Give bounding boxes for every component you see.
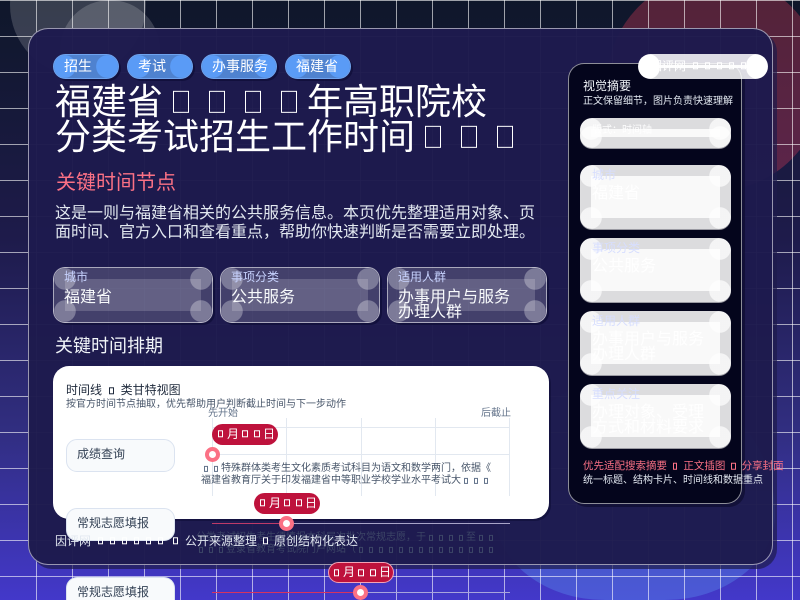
gantt grid [212,418,510,496]
decorative circle: top right pink [607,0,800,191]
summary card: 事项分类: 事项分类 [592,241,640,255]
axis label: end: 后截止 [481,408,511,419]
summary card: 城市 [580,165,731,229]
summary card: 适用人群: 适用人群 [592,314,640,328]
decorative circle: top left large [10,0,146,75]
tag: 福建省 [285,54,351,79]
summary card: 版式 [580,118,731,148]
row 1 label [66,439,175,472]
summary card: 事项分类: 公共服务 [592,258,656,275]
timeline note: 按官方时间节点抽取，优先帮助用户判断截止时间与下一步动作 [66,399,346,410]
title: 福建省 年高职院校 [55,81,487,122]
row 3 label: 常规志愿填报 [77,585,149,599]
summary heading: 视觉摘要 [583,79,631,93]
row 2 description: 登录省教育考试院门户网站（ [226,544,356,555]
row 3 label [66,577,175,600]
row 3 marker [353,585,368,600]
row 2 date pill: 月 日 [269,496,317,510]
row 2 label [66,508,175,541]
visual summary panel [568,63,742,504]
intro paragraph: 这是一则与福建省相关的公共服务信息。本页优先整理适用对象、页 [55,205,535,222]
summary card: 适用人群: 办事用户与服务办理人群 [592,331,704,363]
summary card: 城市: 城市 [592,168,616,182]
row 2 label: 常规志愿填报 [77,516,149,530]
intro paragraph [55,204,535,241]
timeline card [53,366,549,519]
tag: 考试: 考试 [138,58,166,74]
summary card: 重点关注: 办理对象、受理方式和材料要求 [592,404,704,436]
info card: 适用人群: 适用人群 [398,270,446,284]
summary card: 重点关注: 重点关注 [592,387,640,401]
axis label: start: 先开始 [208,408,238,419]
timeline heading: 时间线 类甘特视图 [66,383,181,397]
summary card: 版式: 版式：时间轴 [592,125,652,136]
tag: 福建省: 福建省 [296,58,338,74]
summary note: 正文保留细节，图片负责快速理解 [583,96,733,107]
title: 分类考试招生工作时间 [55,116,415,157]
row 3 track [212,592,510,593]
row 2 date pill [254,493,320,514]
tag: 考试 [127,54,193,79]
info card: 城市: 福建省 [64,289,112,306]
info card: 事项分类: 事项分类 [231,270,279,284]
summary card: 重点关注 [580,384,731,448]
row 1 marker [205,447,220,462]
source pill: 因评网 [650,59,686,73]
summary card: 城市: 福建省 [592,185,640,202]
tag: 办事服务: 办事服务 [212,58,268,74]
info card: 城市: 城市 [64,270,88,284]
row 2 description [196,531,493,555]
footer source line: 因评网 公开来源整理 原创结构化表达 [55,534,358,548]
tag: 招生 [53,54,119,79]
row 3 date pill: 月 日 [343,565,391,579]
row 1 description: 福建省教育厅关于印发福建省中等职业学校学业水平考试大 [201,475,461,486]
row 1 description: 特殊群体类考生文化素质考试科目为语文和数学两门，依据《 [221,463,491,474]
summary description: 统一标题、结构卡片、时间线和数据重点 [583,475,763,486]
section heading: 关键时间排期 [55,336,163,356]
row 3 date pill [328,562,394,583]
info card: 适用人群: 办事用户与服务办理人群 [398,289,510,321]
decorative circle: bottom right blue [495,374,775,600]
row 2 marker [279,516,294,531]
row 1 label: 成绩查询 [77,447,125,461]
tag: 招生: 招生 [64,58,92,74]
source pill [638,54,768,79]
info card: 事项分类: 公共服务 [231,289,295,306]
info card: 事项分类 [220,267,380,323]
info card: 适用人群 [387,267,547,323]
tag group [53,54,353,81]
info card: 城市 [53,267,213,323]
summary card: 事项分类 [580,238,731,302]
intro paragraph: 面时间、官方入口和查看重点，帮助你快速判断是否需要立即处理。 [55,224,535,241]
summary card: 适用人群 [580,311,731,375]
subtitle: 关键时间节点 [56,172,176,194]
decorative circle: top left small [60,0,160,100]
summary tagline: 优先适配搜索摘要 正文插图 分享封面 [583,460,784,472]
row 1 date pill: 月 日 [227,427,275,441]
tag: 办事服务 [201,54,277,79]
row 2 track [212,523,510,524]
row 1 description [201,462,491,486]
row 2 description: 分类考试招生考生须填报本科层次批次常规志愿，于 至 [196,532,476,543]
row 1 date pill [212,424,278,445]
title [55,81,513,157]
